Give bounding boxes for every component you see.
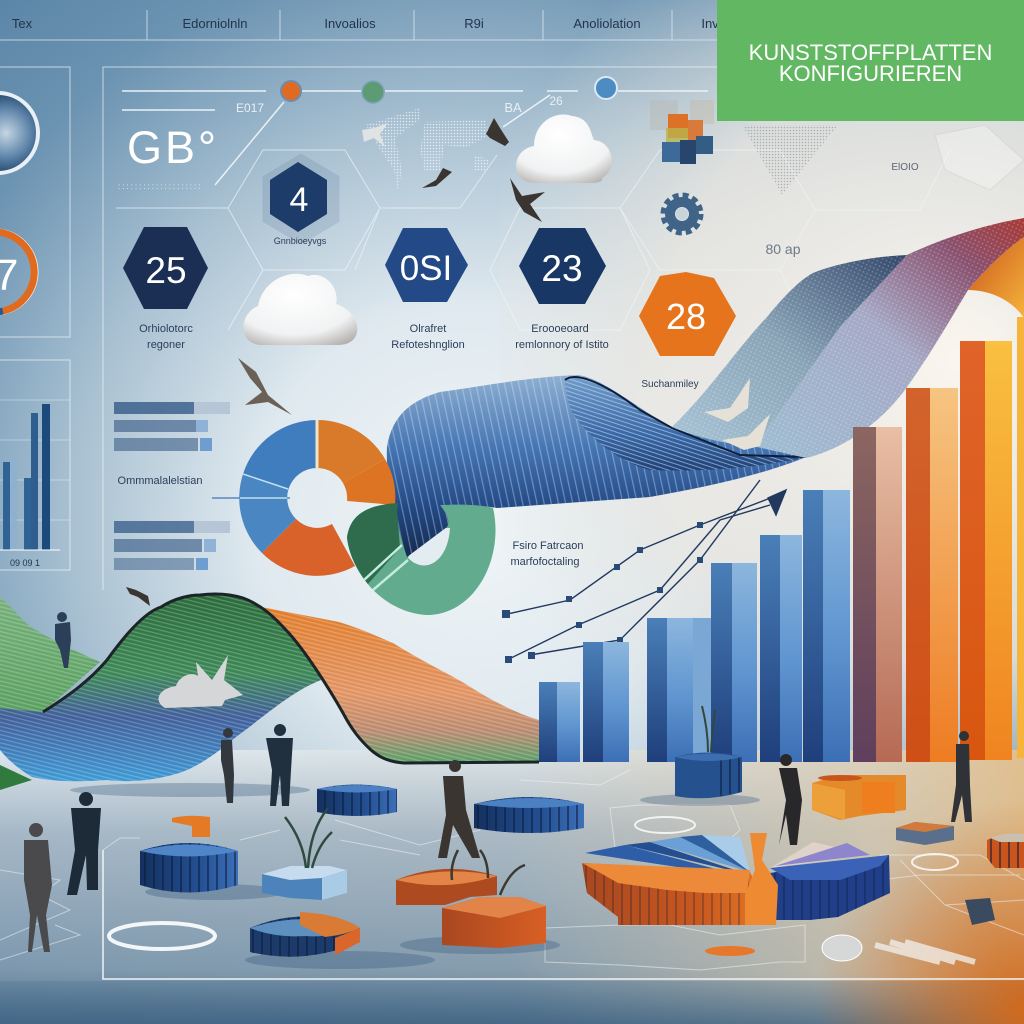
hexagon 23: 23 <box>541 248 583 289</box>
left bar chart <box>0 400 70 568</box>
label under 25 line 2: regoner <box>147 339 185 351</box>
upper mesh ribbon <box>672 218 1024 458</box>
bar 8 <box>906 388 958 762</box>
person back 2 <box>266 724 293 806</box>
warm light right <box>500 0 1024 800</box>
wave orange <box>261 607 539 763</box>
wave green patch <box>0 765 32 790</box>
small cube <box>965 898 995 925</box>
triangle mesh <box>742 125 838 195</box>
ribbon birds <box>704 378 770 450</box>
timeline label 26: 26 <box>549 94 563 108</box>
globe icon <box>0 93 38 173</box>
cubes icon <box>650 100 714 164</box>
bar 7 <box>853 427 902 762</box>
orange tile left <box>396 850 497 905</box>
cloud center <box>243 274 357 345</box>
green call-to-action banner <box>717 0 1024 121</box>
glass polyhedron <box>935 125 1024 190</box>
timeline node orange <box>281 81 301 101</box>
bar 10 <box>1017 317 1024 758</box>
hexagon 23 <box>519 228 606 304</box>
bar 1 <box>539 682 580 762</box>
top navigation bar: Invoalios <box>324 16 376 31</box>
fan left orange stack <box>582 863 775 925</box>
pie tile <box>250 912 360 957</box>
heading GB: GB° <box>127 122 219 173</box>
blue ribbon tube <box>387 375 806 557</box>
hexagon 28: 28 <box>666 296 706 337</box>
timeline node green <box>362 81 384 103</box>
top navigation bar: Inv <box>701 16 719 31</box>
manufacturing label: Fsiro Fatrcaon <box>513 540 583 552</box>
planter blue top <box>675 706 742 798</box>
timeline <box>122 77 708 185</box>
orange tile right <box>442 865 546 948</box>
label under 23 line 2: remlonnory of Istito <box>515 339 609 351</box>
timeline label: BA <box>504 100 522 115</box>
floor tile: blue stacked right <box>474 797 584 833</box>
green ring <box>347 503 496 615</box>
cloud top <box>516 114 612 183</box>
floor tile: blue stacked top <box>317 784 397 816</box>
wave green back <box>0 597 100 712</box>
sustainability label: Suchanmiley <box>641 379 699 390</box>
gauge ring <box>0 232 35 312</box>
left bar chart: 09 09 1 <box>10 558 40 568</box>
floor lines <box>0 770 1024 979</box>
top navigation bar: Edorniolnln <box>182 16 248 31</box>
bar 6 <box>803 490 850 762</box>
hexagon 4: Gnnbioeyvgs <box>274 236 327 246</box>
side label: ElOIO <box>891 162 919 173</box>
fan right upper blades <box>770 842 870 868</box>
hexagon 25 <box>123 227 208 309</box>
orange corner glow <box>700 800 1024 1024</box>
progress bars lower <box>114 521 230 570</box>
orange arch <box>968 237 1024 318</box>
small grey tile <box>896 822 954 845</box>
woman left <box>24 823 52 952</box>
green call-to-action banner: KONFIGURIEREN <box>779 61 962 86</box>
timeline label 2017: E017 <box>236 101 264 115</box>
label under OSI: Olrafret <box>410 323 446 335</box>
fan centre orange <box>745 833 778 925</box>
top navigation bar: R9i <box>464 16 484 31</box>
man left <box>67 792 101 895</box>
connector line to donut <box>212 497 290 499</box>
floor rings <box>109 817 958 949</box>
orange tile far right <box>987 834 1024 868</box>
person on wave <box>55 612 71 668</box>
planter <box>262 808 347 900</box>
green ring dark slice <box>347 503 408 590</box>
person back 1 <box>221 728 234 803</box>
hexagon 4: 4 <box>290 181 308 219</box>
hexagon 28 <box>639 272 736 356</box>
birds <box>126 118 545 606</box>
world map dots <box>366 108 490 190</box>
bar chart <box>539 317 1024 762</box>
floor tile: small orange <box>172 816 210 837</box>
hexagon 4 <box>262 153 340 246</box>
top navigation bar: Tex <box>12 16 33 31</box>
wave ribbon <box>0 594 539 790</box>
orange block <box>812 775 906 820</box>
fan right blue stack <box>770 855 890 920</box>
center fan <box>582 833 890 925</box>
floor <box>0 750 1024 1024</box>
label under 25: Orhiolotorc <box>139 323 193 335</box>
mesh right strip <box>757 218 1024 458</box>
wave cloud <box>159 655 243 708</box>
wave main sheet <box>0 594 321 781</box>
walking man <box>438 760 480 858</box>
shadows <box>70 783 760 969</box>
bar 4 <box>711 563 757 762</box>
manufacturing label <box>510 540 583 568</box>
mesh left strip <box>672 255 907 447</box>
small value: 80 ap <box>765 241 801 257</box>
progress bars label: Ommmalalelstian <box>118 475 202 487</box>
wave dark edge <box>43 594 539 763</box>
heading caption: :::::::::::::::::::: <box>118 182 202 191</box>
hexagon OSI <box>385 228 468 302</box>
timeline node blue <box>595 77 617 99</box>
donut chart <box>239 420 395 576</box>
frame panels and hexagon lines <box>0 67 1024 590</box>
floor chart panel <box>705 935 975 962</box>
bar 2 <box>583 642 629 762</box>
fan upper blue blades <box>585 835 750 878</box>
progress bars upper <box>114 402 230 451</box>
arrow chart <box>502 480 786 663</box>
floor tile: blue cylinder left <box>140 843 238 892</box>
label under OSI line 2: Refoteshnglion <box>391 339 465 351</box>
hexagon 25: 25 <box>145 250 187 291</box>
hexagon OSI: 0SI <box>400 249 452 288</box>
bar 5 <box>760 535 802 762</box>
green call-to-action banner: KUNSTSTOFFPLATTEN <box>749 40 992 65</box>
bar 3 <box>647 618 711 762</box>
man right <box>951 731 972 822</box>
manufacturing label: marfofoctaling <box>510 556 580 568</box>
top navigation bar: Anoliolation <box>573 16 641 31</box>
man near fan <box>779 754 802 845</box>
bar 9 <box>960 341 1012 760</box>
label under 23: Eroooeoard <box>531 323 589 335</box>
people <box>24 612 972 952</box>
top navigation bar <box>0 10 719 40</box>
gear icon <box>663 195 701 233</box>
bottom band <box>0 981 1024 1024</box>
